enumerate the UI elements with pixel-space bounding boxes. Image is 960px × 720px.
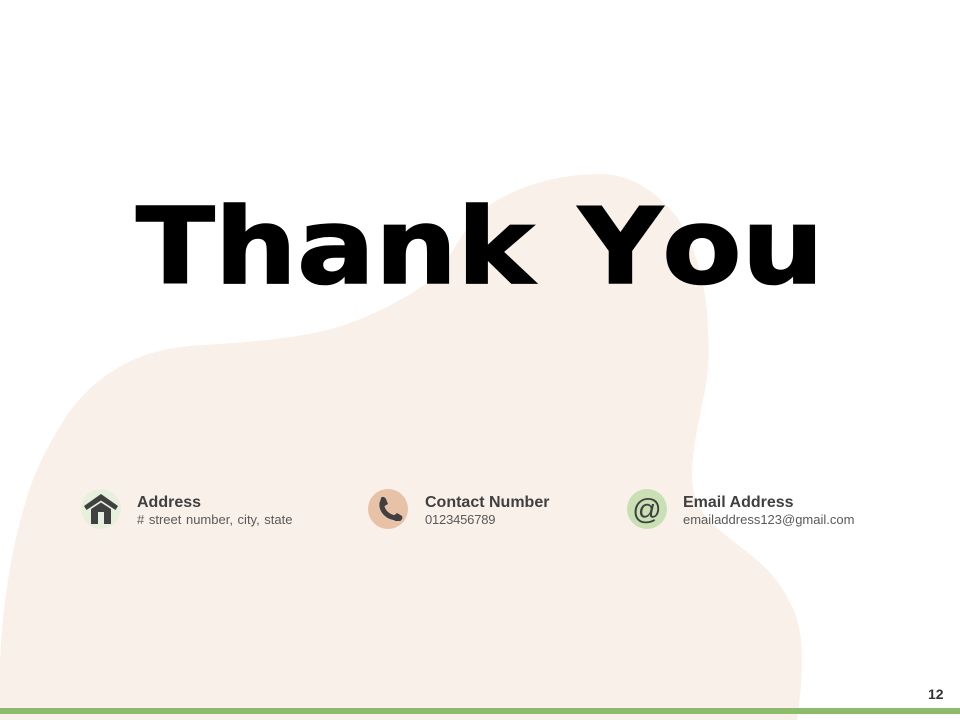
email heading: Email Address [683, 494, 794, 510]
icon: at sign: @ [632, 494, 662, 526]
address text: # street number, city, state [137, 512, 292, 526]
contact item: address [81, 489, 292, 529]
icon: house [81, 489, 121, 529]
email text: emailaddress123@gmail.com [683, 512, 854, 526]
contact item: phone [368, 489, 550, 529]
icon: phone [368, 489, 408, 529]
icon: at sign [627, 489, 667, 529]
contact item: email [627, 489, 854, 529]
footer bar [0, 708, 960, 714]
title: Thank You [136, 186, 824, 308]
phone text: 0123456789 [425, 512, 495, 526]
phone heading: Contact Number [425, 494, 549, 510]
page number: 12 [928, 686, 944, 702]
address heading: Address [137, 494, 201, 510]
